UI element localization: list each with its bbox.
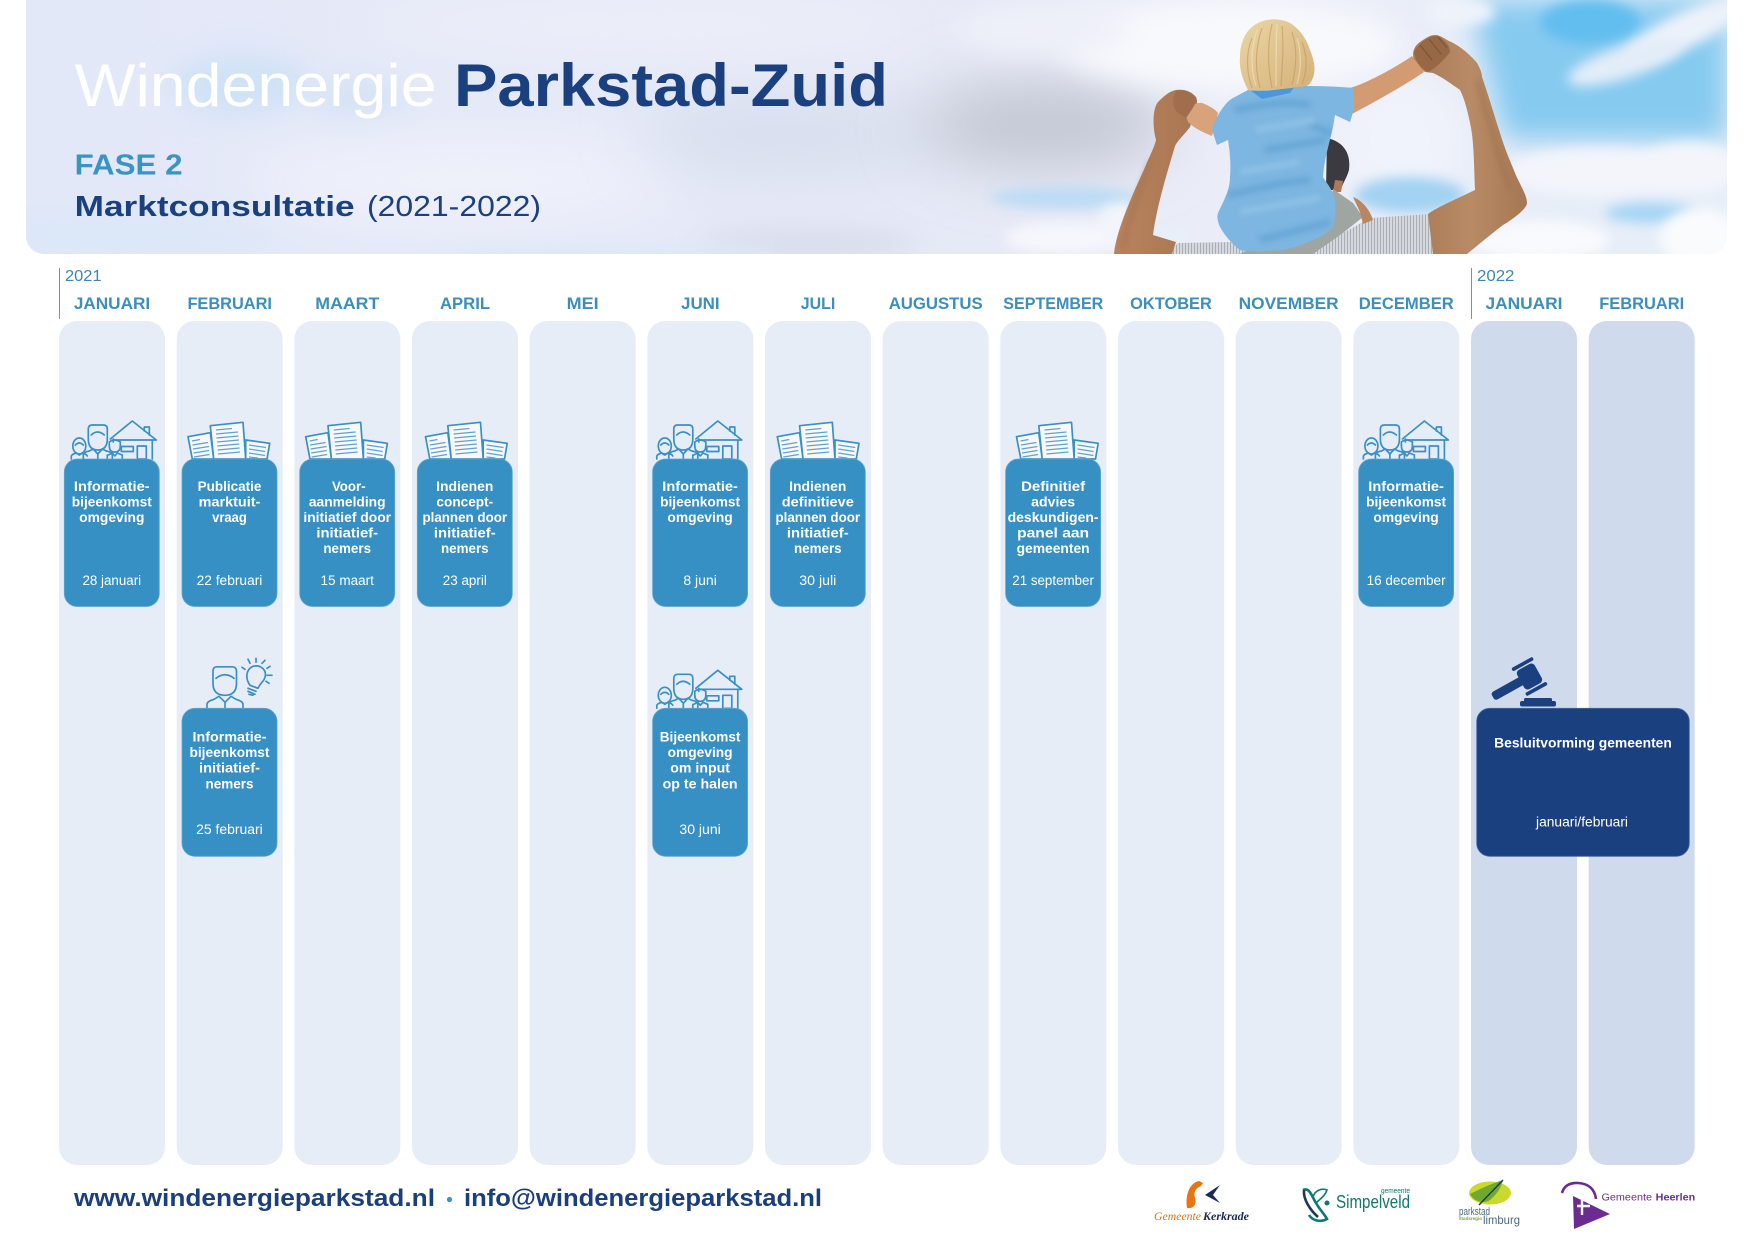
footer contact line: info@windenergieparkstad.nl xyxy=(464,1185,822,1212)
card: Informatiebijeenkomst initiatiefnemers 25 februari: initiatief- xyxy=(199,761,260,776)
card: Publicatie marktuitvraag 22 februari: vraag xyxy=(212,510,247,525)
card: Informatiebijeenkomst omgeving 8 juni: 8 juni xyxy=(683,573,717,588)
month headings: JUNI xyxy=(681,294,720,313)
subtitle: Marktconsultatie xyxy=(75,191,355,223)
title xyxy=(75,52,888,119)
card: Vooraanmelding initiatief 15 maart xyxy=(300,422,395,606)
logo: Gemeente Heerlen: Gemeente xyxy=(1602,1192,1652,1204)
card: Definitief advies 21 september: advies xyxy=(1031,494,1075,510)
card: Informatiebijeenkomst omgeving 28 januari xyxy=(64,421,159,606)
card: Publicatie marktuitvraag 22 februari: marktuit- xyxy=(199,494,260,510)
logo: Gemeente Simpelveld: Simpelveld xyxy=(1336,1192,1410,1212)
month headings: MAART xyxy=(315,294,380,313)
title: Parkstad-Zuid xyxy=(454,52,888,119)
child's left arm xyxy=(1185,103,1218,136)
man's fingers over child's wrist xyxy=(1173,90,1196,118)
icon: family and house xyxy=(657,670,742,708)
card: Indienen conceptplannen 23 april: Indienen xyxy=(436,479,493,494)
card: Informatiebijeenkomst initiatiefnemers 25 februari xyxy=(182,658,277,856)
child's blond hair xyxy=(1240,19,1314,91)
month headings: SEPTEMBER xyxy=(1003,294,1103,313)
card: Indienen conceptplannen 23 april: concept- xyxy=(436,494,493,510)
month headings: OKTOBER xyxy=(1130,294,1212,313)
card: Vooraanmelding initiatief 15 maart: 15 maart xyxy=(321,573,374,588)
card: Informatiebijeenkomst omgeving 28 januari: bijeenkomst xyxy=(72,494,152,510)
logo: Gemeente Heerlen xyxy=(1562,1183,1695,1229)
card: Vooraanmelding initiatief 15 maart: Voor- xyxy=(332,479,366,494)
man's striped shirt xyxy=(1167,214,1433,254)
logo: Gemeente Kerkrade: Gemeente xyxy=(1154,1209,1202,1223)
card: Informatiebijeenkomst initiatiefnemers 25 februari: 25 februari xyxy=(196,822,263,837)
logo: Parkstad Limburg: stadsregio xyxy=(1459,1216,1482,1221)
card: Besluitvorming gemeenten januari/februari xyxy=(1477,657,1689,856)
card: Definitief advies 21 september: 21 september xyxy=(1012,573,1094,588)
child's blue t-shirt xyxy=(1212,86,1354,252)
card: Definitief advies 21 september: Definitief xyxy=(1021,479,1086,494)
month headings: MEI xyxy=(567,294,599,313)
card: Informatiebijeenkomst omgeving 8 juni xyxy=(653,421,748,606)
month headings: FEBRUARI xyxy=(1599,294,1684,313)
year marker 2021 xyxy=(60,268,102,319)
card: Informatiebijeenkomst initiatiefnemers 25 februari: bijeenkomst xyxy=(190,745,270,760)
child's shorts and leg xyxy=(1240,189,1363,254)
man's left arm and hand xyxy=(1114,90,1197,254)
card: Informatiebijeenkomst omgeving 16 december xyxy=(1359,421,1454,606)
icon: gavel xyxy=(1485,657,1556,711)
card: Bijeenkomst omgeving om input op te halen 30 juni: om input xyxy=(670,761,730,776)
card: Indienen definitieve plannen 30 juli: initiatief- xyxy=(787,526,849,540)
card: Bijeenkomst omgeving om input op te halen 30 juni xyxy=(653,670,748,856)
month headings: JULI xyxy=(801,294,835,313)
card: Informatiebijeenkomst omgeving 16 december: Informatie- xyxy=(1368,479,1444,494)
month headings: AUGUSTUS xyxy=(889,294,983,313)
logo: Parkstad Limburg: limburg xyxy=(1483,1213,1520,1227)
card: Vooraanmelding initiatief 15 maart: initiatief door xyxy=(303,510,392,525)
card: Indienen conceptplannen 23 april: nemers xyxy=(441,541,489,556)
card: Indienen definitieve plannen 30 juli: Indienen xyxy=(789,479,846,494)
icon: documents xyxy=(426,422,507,459)
card: Informatiebijeenkomst omgeving 8 juni: omgeving xyxy=(667,510,733,525)
card: Informatiebijeenkomst omgeving 8 juni: bijeenkomst xyxy=(660,494,741,510)
year marker 2022 xyxy=(1472,268,1515,319)
card: Indienen definitieve plannen 30 juli: 30 juli xyxy=(799,573,836,588)
title: Windenergie xyxy=(75,52,437,119)
card: Informatiebijeenkomst omgeving 16 december: bijeenkomst xyxy=(1366,494,1447,510)
icon: person with light bulb xyxy=(207,658,272,708)
card: Vooraanmelding initiatief 15 maart: aanmelding xyxy=(309,494,386,510)
icon: family and house xyxy=(657,421,742,459)
footer contact line xyxy=(73,1185,822,1212)
man's right arm and hand xyxy=(1413,35,1527,254)
card: Indienen definitieve plannen 30 juli xyxy=(770,422,865,606)
logo: Gemeente Simpelveld: gemeente xyxy=(1381,1188,1410,1195)
card: Indienen conceptplannen 23 april: 23 april xyxy=(443,573,487,588)
card: Bijeenkomst omgeving om input op te halen 30 juni: op te halen xyxy=(663,776,738,791)
logo: Gemeente Simpelveld xyxy=(1303,1188,1410,1221)
card: Informatiebijeenkomst initiatiefnemers 25 februari: Informatie- xyxy=(192,730,266,745)
month headings: APRIL xyxy=(440,294,490,313)
card: Bijeenkomst omgeving om input op te halen 30 juni: 30 juni xyxy=(679,822,721,837)
card: Vooraanmelding initiatief 15 maart: initiatief- xyxy=(316,526,378,540)
year marker 2021: 2021 xyxy=(65,268,102,285)
logo: Gemeente Kerkrade xyxy=(1154,1181,1250,1223)
icon: family and house xyxy=(71,421,156,459)
month headings xyxy=(74,294,1684,313)
month headings: JANUARI xyxy=(74,294,150,313)
footer contact line: www.windenergieparkstad.nl xyxy=(73,1185,435,1212)
card: Indienen conceptplannen 23 april: initiatief- xyxy=(434,526,496,540)
man's head xyxy=(1326,138,1349,190)
card: Publicatie marktuitvraag 22 februari: 22 februari xyxy=(197,573,262,588)
card: Informatiebijeenkomst omgeving 28 januari: 28 januari xyxy=(82,573,141,588)
card: Indienen definitieve plannen 30 juli: nemers xyxy=(794,541,842,556)
card: Informatiebijeenkomst omgeving 28 januari: omgeving xyxy=(79,510,144,525)
icon: documents xyxy=(777,422,859,459)
card: Indienen definitieve plannen 30 juli: definitieve xyxy=(782,494,854,510)
card: Informatiebijeenkomst omgeving 16 december: 16 december xyxy=(1367,573,1446,588)
icon: documents xyxy=(306,422,387,459)
card: Informatiebijeenkomst omgeving 8 juni: Informatie- xyxy=(662,479,738,494)
arm shading xyxy=(1132,158,1148,196)
child's right arm xyxy=(1350,56,1424,114)
phase label: FASE 2 xyxy=(75,150,183,182)
card: Bijeenkomst omgeving om input op te halen 30 juni: Bijeenkomst xyxy=(660,730,741,745)
card: Indienen conceptplannen 23 april xyxy=(417,422,512,606)
month columns xyxy=(59,321,1695,1165)
year marker 2022: 2022 xyxy=(1477,268,1515,285)
card: Bijeenkomst omgeving om input op te halen 30 juni: omgeving xyxy=(668,745,733,760)
card: Informatiebijeenkomst initiatiefnemers 25 februari: nemers xyxy=(206,776,254,791)
subtitle xyxy=(75,191,541,223)
logo: Parkstad Limburg: parkstad xyxy=(1459,1206,1490,1218)
month headings: FEBRUARI xyxy=(187,294,272,313)
month headings: NOVEMBER xyxy=(1239,294,1339,313)
sky and clouds background xyxy=(0,0,1752,268)
card: Besluitvorming gemeenten januari/februari: Besluitvorming gemeenten xyxy=(1494,736,1672,751)
card: Publicatie marktuitvraag 22 februari: Publicatie xyxy=(198,479,262,494)
subtitle: (2021-2022) xyxy=(367,191,541,223)
icon: family and house xyxy=(1363,421,1448,459)
card: Definitief advies 21 september: gemeenten xyxy=(1017,541,1090,556)
logo: Gemeente Heerlen: Heerlen xyxy=(1656,1192,1695,1204)
logo: Parkstad Limburg xyxy=(1459,1180,1520,1227)
card: Informatiebijeenkomst omgeving 16 december: omgeving xyxy=(1373,510,1439,525)
card: Informatiebijeenkomst omgeving 28 januari: Informatie- xyxy=(74,479,150,494)
card: Besluitvorming gemeenten januari/februari: januari/februari xyxy=(1535,815,1628,830)
month headings: JANUARI xyxy=(1486,294,1562,313)
month headings: DECEMBER xyxy=(1359,294,1454,313)
icon: documents xyxy=(1016,422,1098,459)
card: Indienen conceptplannen 23 april: plannen door xyxy=(422,510,508,525)
card: Publicatie marktuitvraag 22 februari xyxy=(182,422,277,606)
card: Definitief advies 21 september xyxy=(1006,422,1101,606)
icon: documents xyxy=(188,422,270,459)
header banner with photo xyxy=(0,0,1752,268)
card: Definitief advies 21 september: panel aan xyxy=(1017,526,1089,540)
card: Indienen definitieve plannen 30 juli: plannen door xyxy=(775,510,861,525)
card: Definitief advies 21 september: deskundigen- xyxy=(1008,510,1099,525)
blue sky upper right xyxy=(1470,0,1727,140)
card: Vooraanmelding initiatief 15 maart: nemers xyxy=(323,541,371,556)
logo: Gemeente Kerkrade: Kerkrade xyxy=(1202,1209,1250,1223)
